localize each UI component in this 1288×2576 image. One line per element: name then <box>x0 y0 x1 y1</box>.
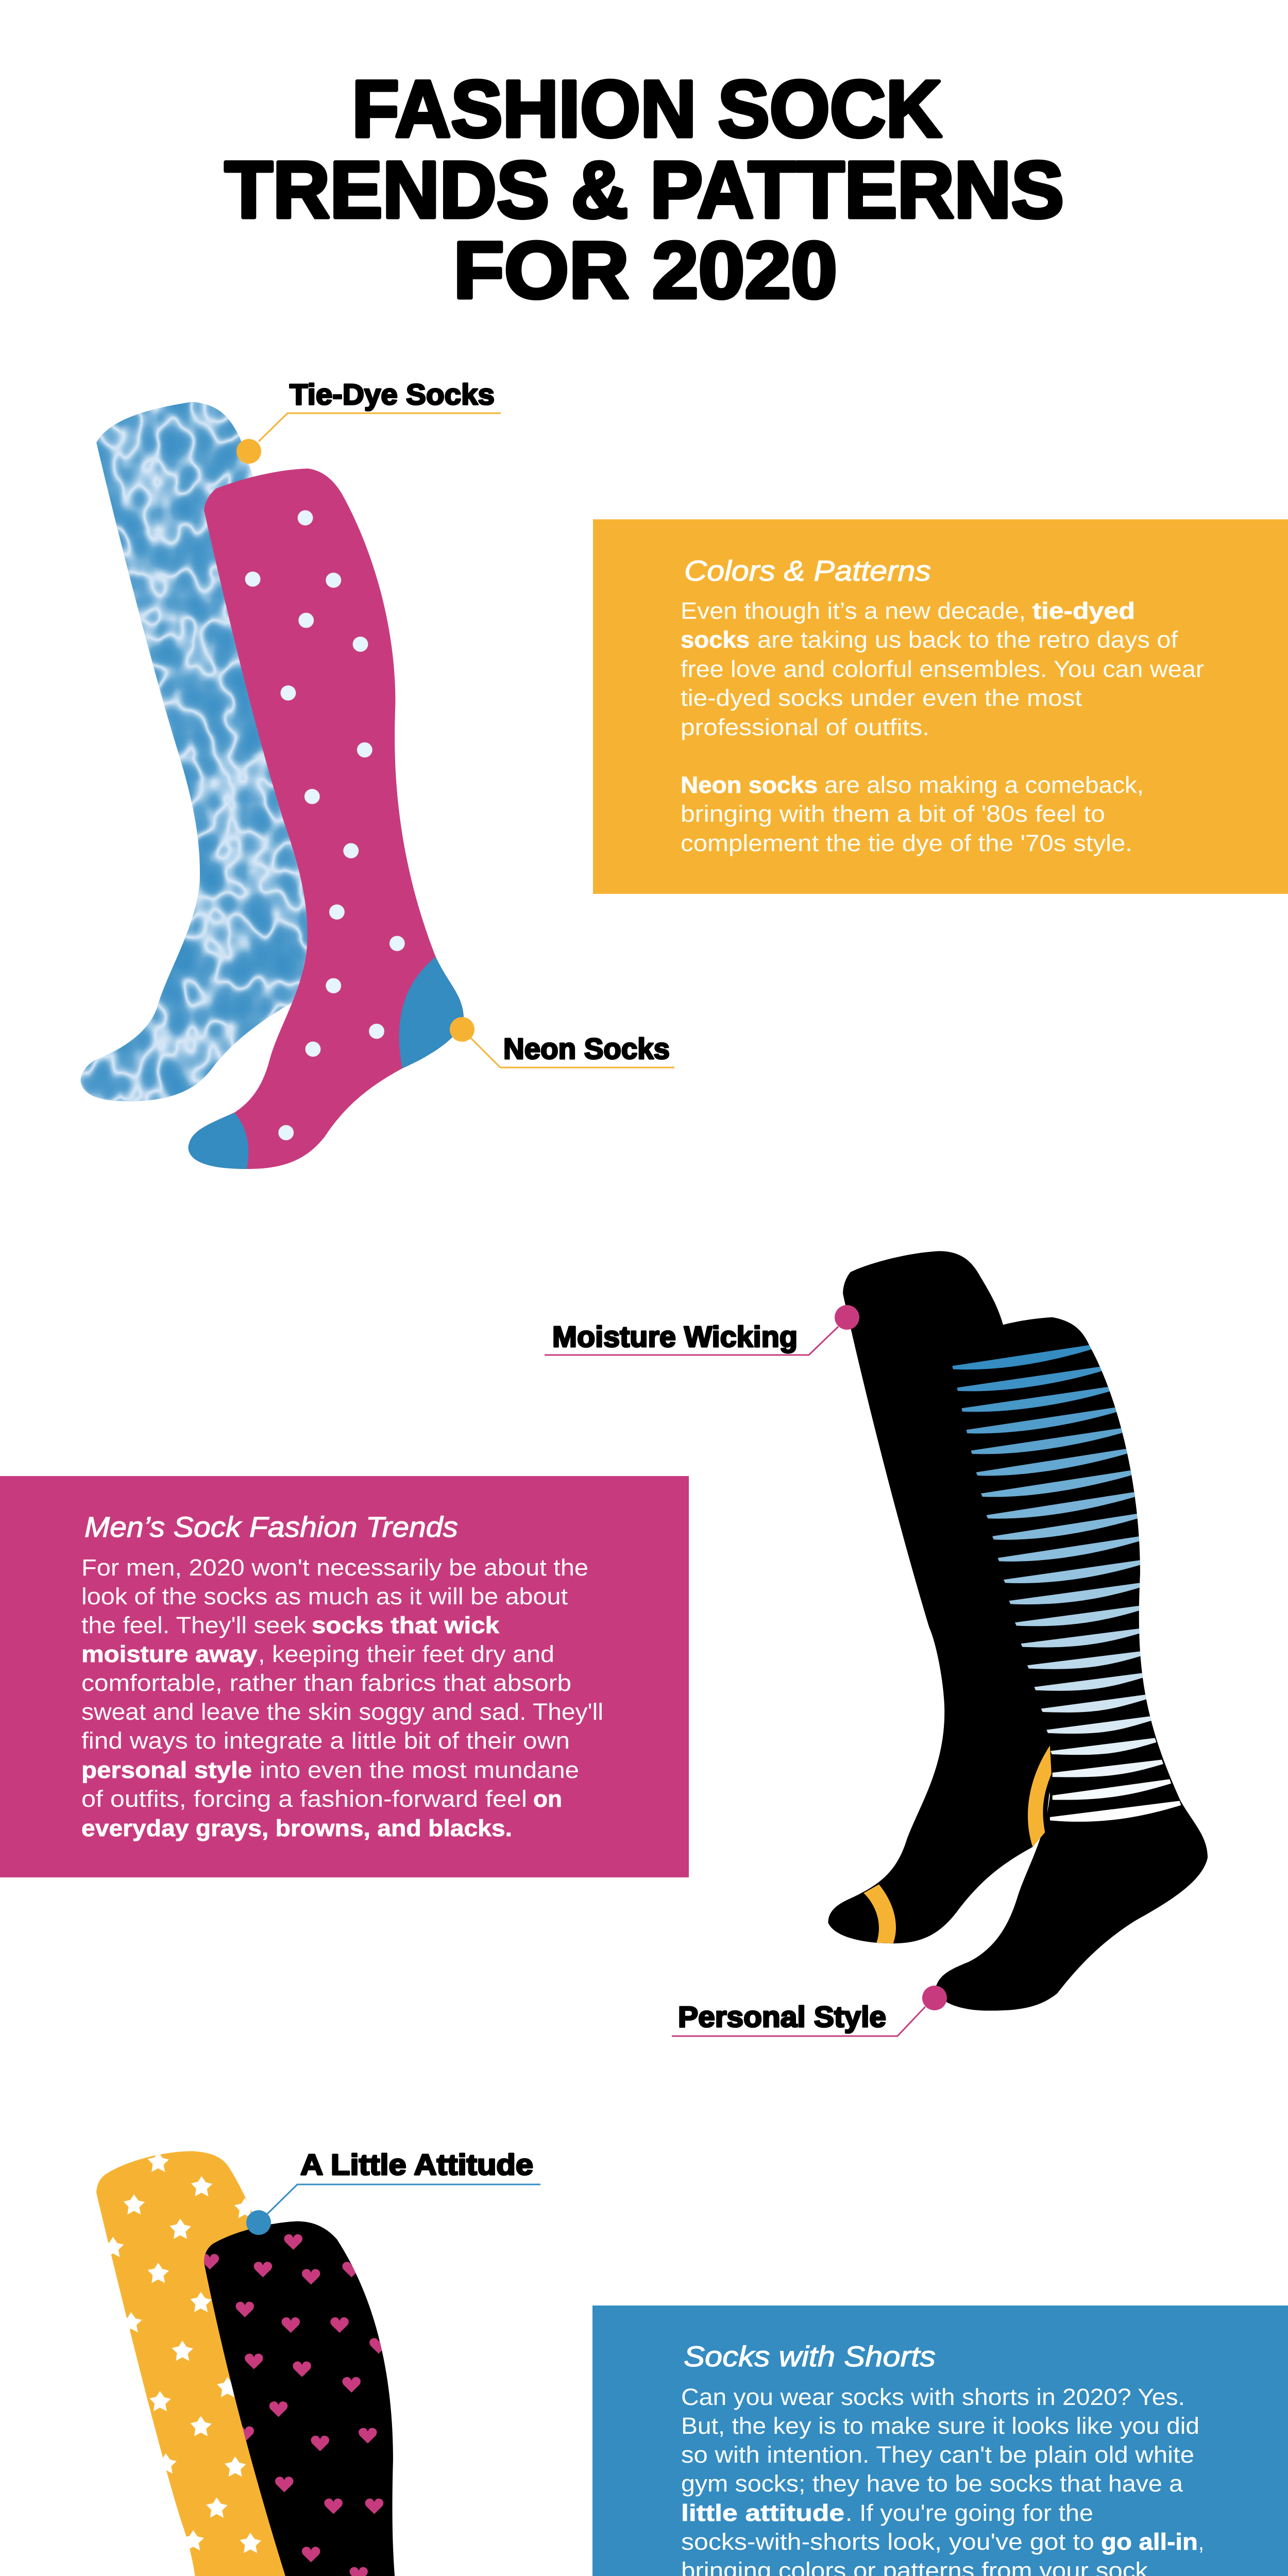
panel body text: Neon socks <box>681 772 818 798</box>
panel body text: moisture away <box>81 1641 257 1667</box>
panel: socks with shorts <box>592 2306 1288 2576</box>
illustration: tie-dye and neon socks <box>77 399 479 1180</box>
panel body text: little attitude <box>681 2500 844 2526</box>
panel body text: But, the key is to make sure it looks like you did <box>681 2413 1199 2439</box>
panel body text: on <box>533 1786 562 1812</box>
panel body text: For men, 2020 won't necessarily be about the <box>81 1554 588 1581</box>
panel body text: Even though it’s a new decade, <box>681 598 1026 624</box>
panel body text: sweat and leave the skin soggy and sad. They'll <box>81 1699 603 1725</box>
gradient stripes <box>952 1345 1181 1822</box>
callout: Personal Style: Personal Style <box>678 2001 886 2033</box>
panel background <box>592 2306 1288 2576</box>
yellow star sock <box>96 2151 285 2576</box>
callout: Moisture Wicking <box>545 1305 859 1355</box>
panel heading: Colors & Patterns <box>684 554 931 587</box>
callout: Moisture Wicking: Moisture Wicking <box>552 1320 798 1353</box>
panel body text: socks-with-shorts look, you've got to <box>681 2529 1094 2555</box>
callout: A Little Attitude: A Little Attitude <box>300 2148 533 2181</box>
panel heading: Socks with Shorts <box>684 2340 936 2372</box>
title: FOR 2020 <box>453 226 837 315</box>
panel body text: into even the most mundane <box>260 1757 579 1783</box>
panel body text: , <box>1198 2529 1204 2555</box>
panel body text: . If you're going for the <box>845 2500 1093 2526</box>
panel: colors and patterns <box>593 519 1288 894</box>
tie-dye sock <box>80 402 308 1101</box>
callout: Personal Style <box>672 1986 947 2036</box>
panel heading: Men’s Sock Fashion Trends <box>84 1511 458 1543</box>
title: TRENDS & PATTERNS <box>225 145 1064 235</box>
panel body text: socks <box>681 626 750 653</box>
illustration: black striped socks <box>828 1251 1208 2011</box>
orange heel band <box>1028 1745 1052 1847</box>
illustration: star and heart socks <box>96 2151 395 2576</box>
panel body text: so with intention. They can't be plain old white <box>681 2442 1194 2468</box>
panel: men's sock fashion trends <box>0 1476 689 1877</box>
neon pink sock <box>188 468 464 1169</box>
panel body text: Can you wear socks with shorts in 2020? Yes. <box>681 2384 1185 2410</box>
front black sock <box>936 1317 1208 2011</box>
callout: Neon Socks <box>450 1017 674 1067</box>
panel body text <box>81 1554 603 1841</box>
panel body text <box>681 598 1204 856</box>
panel body text: find ways to integrate a little bit of their own <box>81 1727 570 1754</box>
panel body text: are taking us back to the retro days of <box>757 626 1178 653</box>
title: FASHION SOCK <box>352 64 942 154</box>
panel body text: look of the socks as much as it will be about <box>81 1583 568 1609</box>
panel body text: gym socks; they have to be socks that have a <box>681 2470 1183 2497</box>
panel body text: are also making a comeback, <box>824 772 1144 798</box>
panel body text: socks that wick <box>312 1612 500 1638</box>
panel body text: personal style <box>81 1757 252 1783</box>
callout: Tie-Dye Socks <box>236 378 501 464</box>
callout: Neon Socks: Neon Socks <box>503 1032 670 1065</box>
blue heel and toe <box>188 957 464 1169</box>
panel background <box>0 1476 689 1877</box>
title <box>225 64 1064 315</box>
panel background <box>593 519 1288 894</box>
panel body text: complement the tie dye of the '70s style. <box>681 830 1132 856</box>
panel body text: bringing with them a bit of '80s feel to <box>681 801 1105 827</box>
panel body text: the feel. They'll seek <box>81 1612 307 1638</box>
panel body text <box>681 2384 1204 2576</box>
panel body text: go all-in <box>1101 2529 1198 2555</box>
panel body text: tie-dyed <box>1032 598 1135 624</box>
panel body text: comfortable, rather than fabrics that absorb <box>81 1670 571 1696</box>
polka dots <box>245 510 405 1140</box>
panel body text: free love and colorful ensembles. You can wear <box>681 656 1204 682</box>
panel body text: everyday grays, browns, and blacks. <box>81 1815 512 1841</box>
back black sock <box>828 1251 1052 1943</box>
panel body text: professional of outfits. <box>681 714 929 740</box>
black heart sock <box>204 2222 395 2576</box>
orange toe band <box>863 1884 896 1943</box>
panel body text: , keeping their feet dry and <box>258 1641 554 1667</box>
panel body text: tie-dyed socks under even the most <box>681 685 1082 711</box>
callout: Tie-Dye Socks: Tie-Dye Socks <box>290 378 495 411</box>
callout: A Little Attitude <box>246 2148 540 2235</box>
panel body text: of outfits, forcing a fashion-forward feel <box>81 1786 527 1812</box>
